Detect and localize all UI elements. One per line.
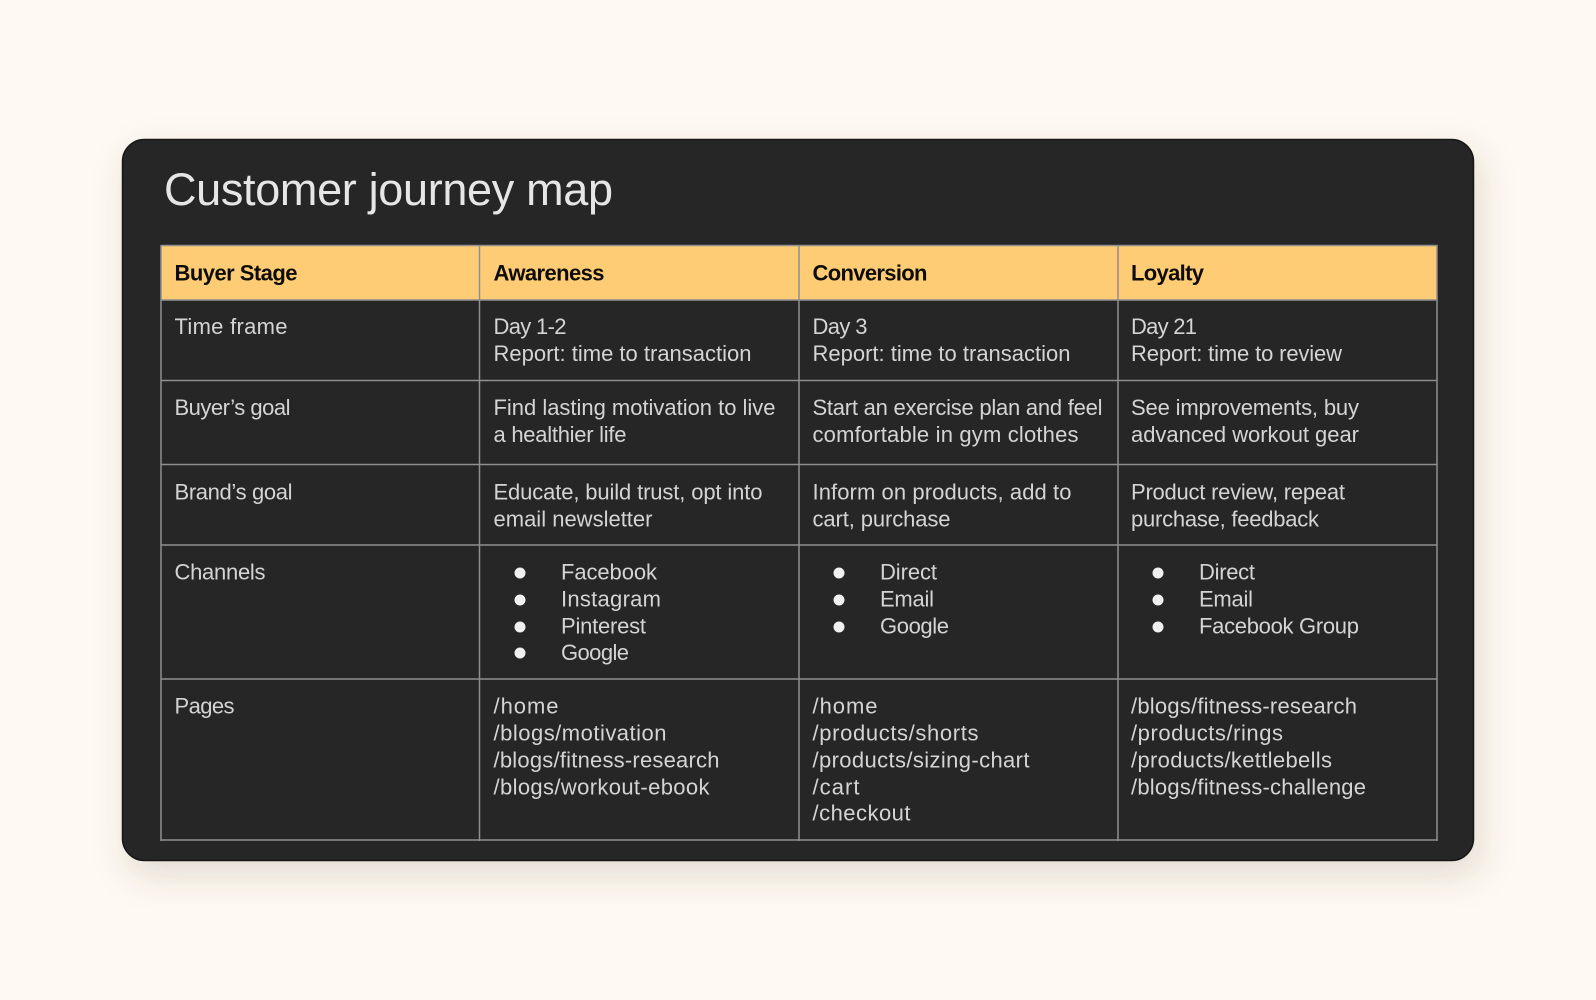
cell: conversion buyer's goal: Start an exercise plan and feel (812, 395, 1102, 420)
cell: loyalty buyer's goal: See improvements, buy (1131, 395, 1359, 420)
list: awareness channels: Instagram (561, 586, 661, 612)
cell: conversion pages: /cart (812, 774, 860, 800)
row label: Channels: Channels (174, 560, 266, 584)
cell: awareness pages: /blogs/motivation (494, 720, 666, 746)
cell: conversion brand's goal (812, 480, 1072, 532)
cell: awareness time frame: Day 1-2 (494, 314, 566, 339)
cell: loyalty buyer's goal: advanced workout gear (1131, 422, 1359, 447)
list: awareness channels (514, 560, 661, 665)
header: Buyer Stage: Buyer Stage (174, 260, 298, 286)
cell: loyalty pages (1131, 694, 1366, 800)
cell: loyalty pages: /products/kettlebells (1131, 748, 1332, 772)
cell: conversion brand's goal: Inform on products, add to (812, 480, 1072, 504)
cell: conversion pages (812, 694, 1030, 826)
table header row (161, 245, 1437, 300)
cell: awareness time frame: Report: time to transaction (494, 341, 752, 366)
cell: loyalty pages: /blogs/fitness-research (1131, 694, 1357, 718)
list: awareness channels: Pinterest (561, 614, 646, 638)
cell: conversion buyer's goal: comfortable in gym clothes (812, 422, 1078, 447)
card background (122, 140, 1474, 860)
cell: awareness brand's goal (494, 480, 762, 532)
cell: loyalty brand's goal (1131, 480, 1345, 532)
header: Conversion: Conversion (812, 260, 928, 286)
cell: loyalty time frame: Day 21 (1131, 314, 1197, 339)
list: loyalty channels: Facebook Group (1199, 614, 1359, 638)
cell: loyalty buyer's goal (1131, 395, 1359, 447)
cell: loyalty pages: /blogs/fitness-challenge (1131, 774, 1366, 800)
cell: loyalty brand's goal: purchase, feedback (1131, 506, 1320, 532)
list: loyalty channels: Direct (1199, 560, 1255, 584)
cell: awareness pages: /blogs/fitness-research (494, 748, 720, 772)
cell: awareness buyer's goal (494, 395, 776, 447)
row: brand's goal (174, 480, 1345, 532)
list: awareness channels: Google (561, 640, 629, 665)
row: channels (174, 560, 1359, 665)
cell: awareness brand's goal: email newsletter (494, 506, 652, 532)
table: buyer stages (161, 245, 1438, 841)
cell: conversion pages: /products/shorts (812, 720, 978, 746)
cell: awareness time frame (494, 314, 752, 366)
row label: Buyer's goal: Buyer’s goal (174, 395, 290, 420)
cell: conversion pages: /home (812, 694, 878, 718)
cell: loyalty time frame (1131, 314, 1342, 366)
cell: awareness pages (494, 694, 720, 800)
cell: awareness brand's goal: Educate, build trust, opt into (494, 480, 762, 504)
cell: conversion time frame: Report: time to transaction (812, 341, 1070, 366)
cell: awareness buyer's goal: Find lasting motivation to live (494, 395, 776, 420)
cell: conversion time frame: Day 3 (812, 314, 868, 339)
cell: conversion brand's goal: cart, purchase (812, 506, 950, 532)
cell: loyalty time frame: Report: time to review (1131, 341, 1342, 366)
list: conversion channels: Email (880, 586, 934, 612)
cell: loyalty pages: /products/rings (1131, 720, 1283, 746)
header: Loyalty: Loyalty (1131, 260, 1205, 286)
row: time frame (174, 314, 1342, 366)
list: conversion channels (834, 560, 949, 638)
row label: Brand's goal: Brand’s goal (174, 480, 292, 504)
header: Awareness: Awareness (494, 260, 604, 286)
cell: conversion pages: /products/sizing-chart (812, 748, 1030, 772)
title: Customer journey map (164, 164, 613, 215)
cell: loyalty brand's goal: Product review, repeat (1131, 480, 1345, 504)
panel: customer journey map card (122, 140, 1474, 860)
list: awareness channels: Facebook (561, 560, 658, 584)
row label: Pages: Pages (174, 694, 234, 718)
list: conversion channels: Direct (880, 560, 937, 584)
cell: conversion time frame (812, 314, 1070, 366)
list: loyalty channels (1152, 560, 1359, 638)
row label: Time frame: Time frame (174, 314, 288, 339)
cell: conversion pages: /checkout (812, 800, 910, 826)
row: buyer's goal (174, 395, 1359, 447)
cell: awareness pages: /home (494, 694, 558, 718)
list: conversion channels: Google (880, 614, 949, 638)
row: pages (174, 694, 1366, 826)
cell: awareness pages: /blogs/workout-ebook (494, 774, 710, 800)
cell: awareness buyer's goal: a healthier life (494, 422, 626, 447)
list: loyalty channels: Email (1199, 586, 1253, 612)
cell: conversion buyer's goal (812, 395, 1102, 447)
